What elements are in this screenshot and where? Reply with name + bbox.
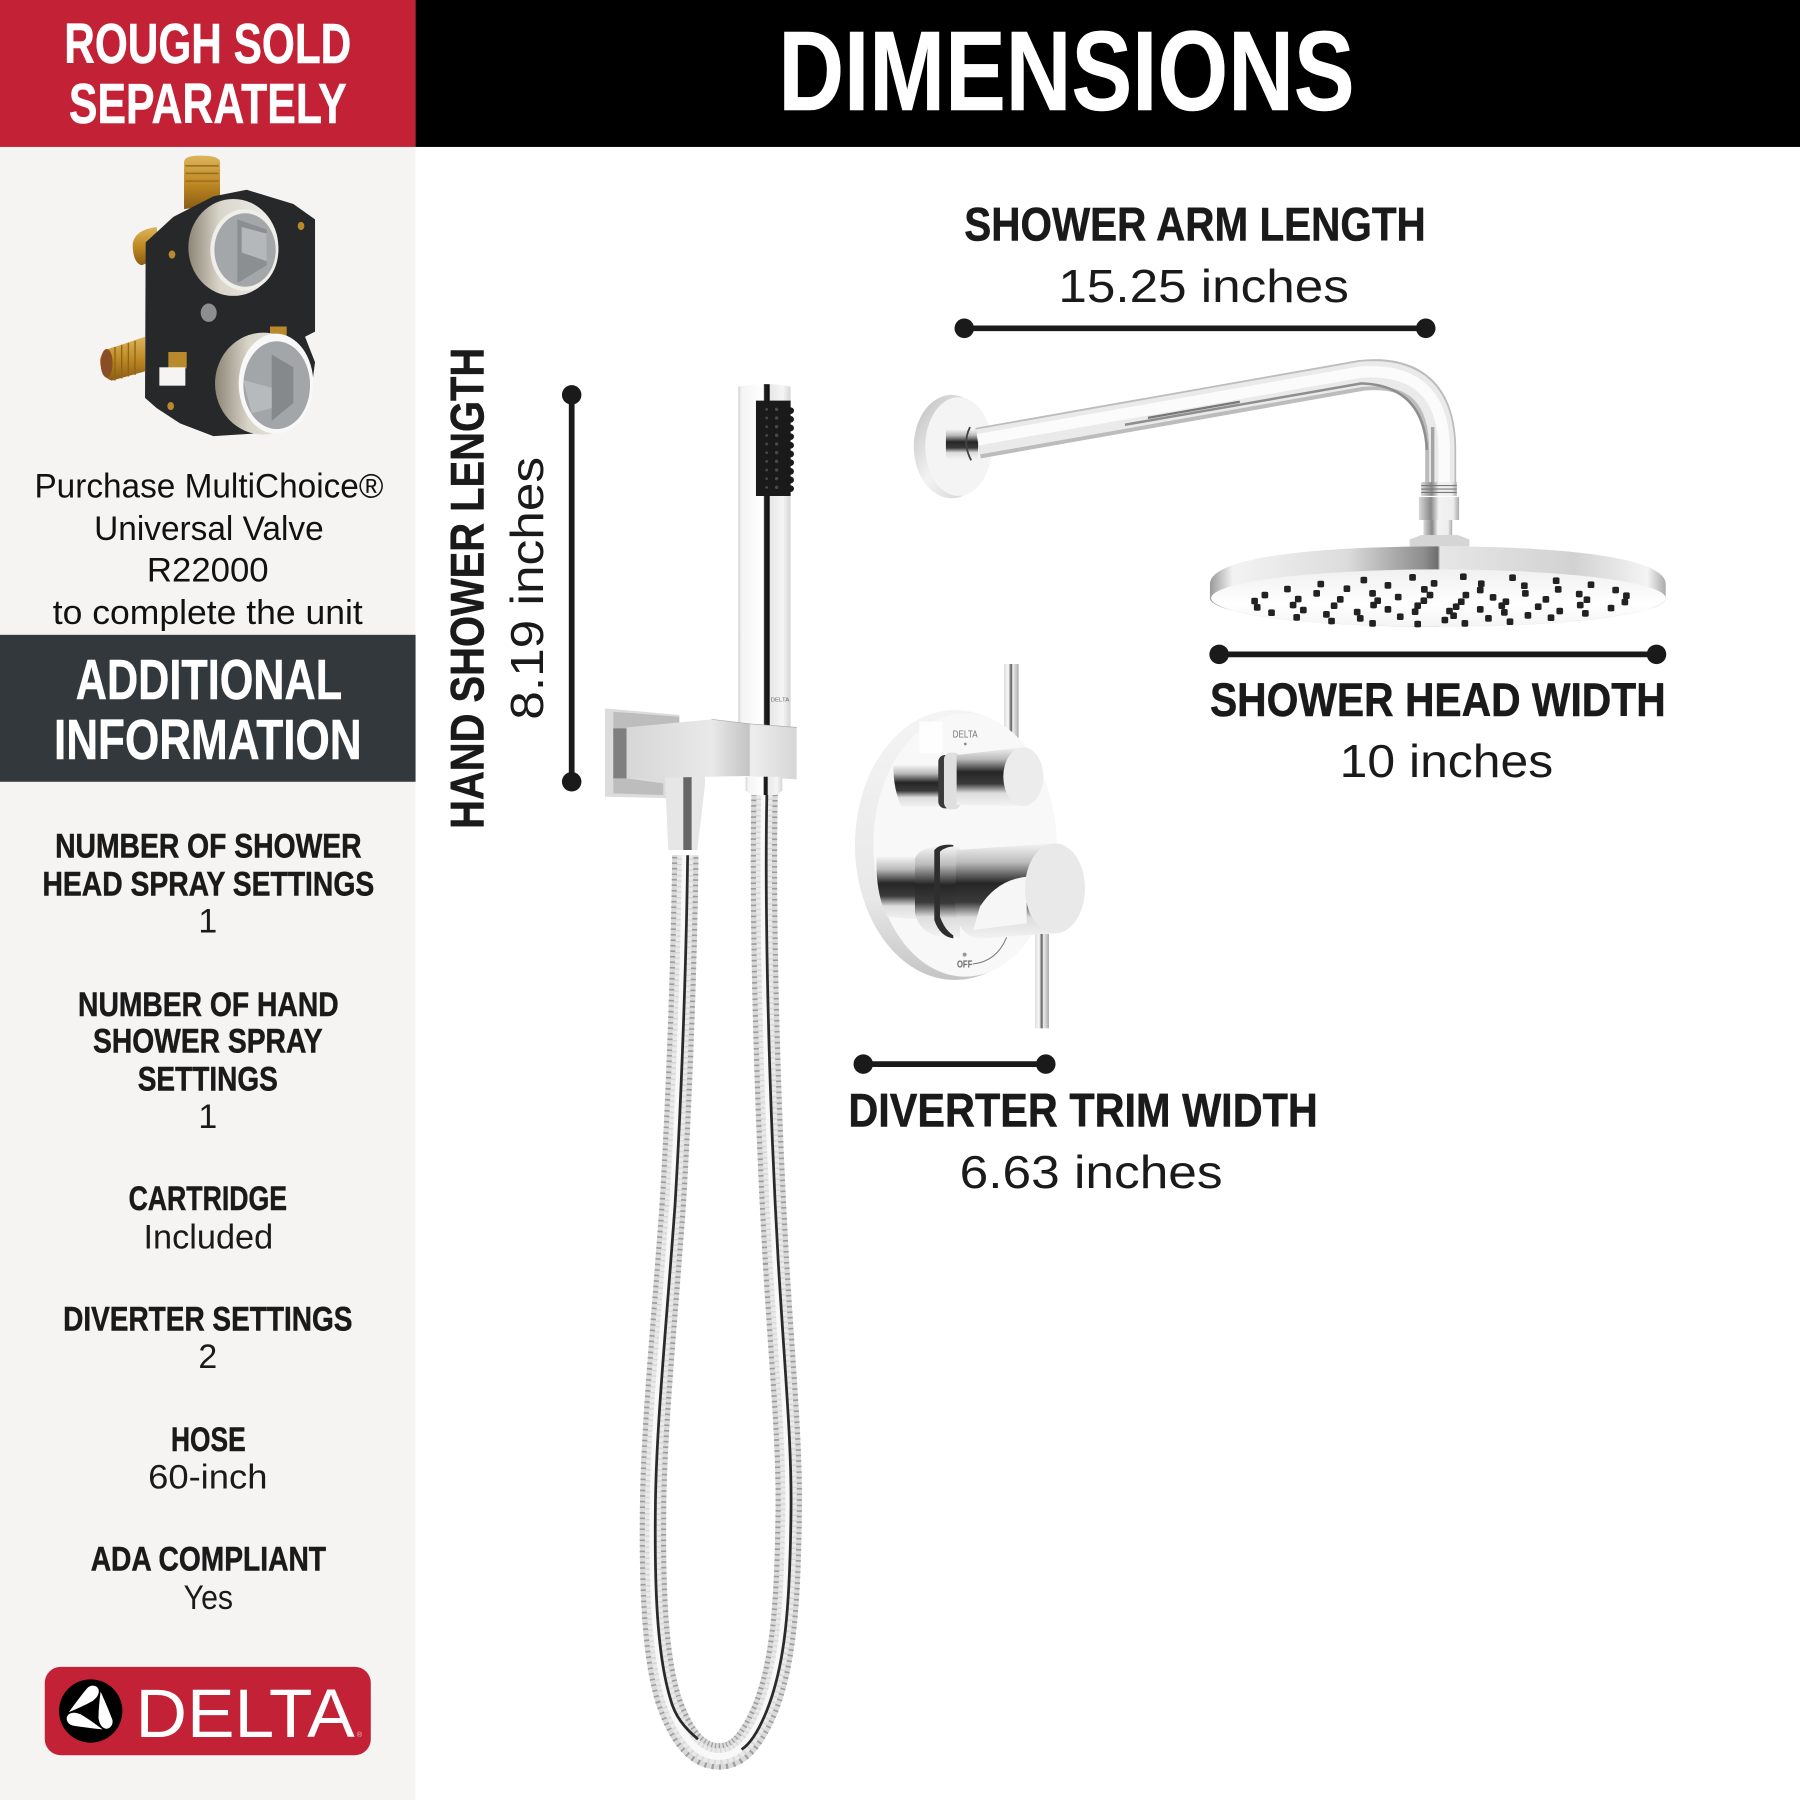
- illustration: shower arm and rain head: [914, 372, 1666, 627]
- upper handle: [893, 747, 1043, 809]
- spec: ada compliant: [91, 1540, 326, 1617]
- logo: delta: ®: [357, 1731, 362, 1739]
- header text: INFORMATION: [54, 708, 362, 771]
- header text: [54, 648, 362, 771]
- spec: cartridge: CARTRIDGE: [129, 1180, 287, 1218]
- spec: hand shower spray settings: SHOWER SPRAY: [93, 1023, 323, 1061]
- dimension: diverter trim width: DIVERTER TRIM WIDTH: [848, 1084, 1318, 1137]
- dimension: shower arm length: 15.25 inches: [1058, 260, 1349, 312]
- text block: purchase valve note: Purchase MultiChoice®: [34, 468, 383, 506]
- lower lever: [1035, 934, 1049, 1028]
- dimension: hand shower length: [440, 348, 581, 829]
- lower handle: [915, 843, 1085, 938]
- dimension: hand shower length: 8.19 inches: [501, 457, 553, 720]
- text block: purchase valve note: [34, 468, 383, 632]
- spec: hose: HOSE: [171, 1421, 246, 1459]
- panel: dimensions title bar: [416, 0, 1800, 147]
- spec: hand shower spray settings: 1: [198, 1098, 217, 1136]
- title: DIMENSIONS: [778, 8, 1355, 135]
- dimension: shower head width: SHOWER HEAD WIDTH: [1210, 673, 1666, 726]
- plate logo: DELTA: [953, 729, 978, 740]
- connector: [1410, 482, 1469, 546]
- dimension: shower arm length: [955, 197, 1436, 338]
- illustration: hand shower: [605, 384, 797, 850]
- spec: shower head spray settings: NUMBER OF SHOWER: [55, 828, 362, 866]
- text block: purchase valve note: to complete the unit: [53, 594, 363, 632]
- wand: [738, 384, 791, 727]
- dimension: shower arm length: SHOWER ARM LENGTH: [964, 197, 1426, 250]
- head face: [1211, 569, 1666, 627]
- dimension: diverter trim width: 6.63 inches: [960, 1146, 1223, 1198]
- spray face: [756, 401, 794, 496]
- spec: diverter settings: [63, 1300, 352, 1376]
- header text: ADDITIONAL: [76, 648, 342, 711]
- spec: diverter settings: DIVERTER SETTINGS: [63, 1300, 352, 1338]
- dimension: diverter trim width: [848, 1054, 1318, 1198]
- panel: specification list: [42, 828, 374, 1617]
- wand logo: DELTA: [771, 698, 790, 704]
- off marking: [957, 937, 1007, 971]
- panel: additional information header: [0, 635, 416, 782]
- spec: cartridge: [129, 1180, 287, 1256]
- spec: ada compliant: Yes: [184, 1579, 233, 1617]
- spec: hand shower spray settings: [78, 986, 339, 1136]
- logo: delta: [45, 1667, 371, 1755]
- icon: universal valve rough-in: [100, 156, 315, 436]
- spec: ada compliant: ADA COMPLIANT: [91, 1540, 326, 1578]
- dimension: shower head width: 10 inches: [1340, 735, 1553, 787]
- banner heading: ROUGH SOLD: [64, 12, 351, 75]
- dimension: shower head width: [1209, 645, 1666, 787]
- plate logo: [919, 722, 978, 753]
- spec: hose: [148, 1421, 267, 1496]
- off marking: OFF: [957, 960, 972, 971]
- panel: rough sold separately banner: [0, 0, 416, 147]
- text block: purchase valve note: R22000: [147, 551, 269, 589]
- logo: delta: DELTA: [135, 1675, 355, 1752]
- spec: cartridge: Included: [143, 1218, 273, 1256]
- spec: shower head spray settings: 1: [198, 903, 217, 941]
- banner heading: [64, 12, 351, 135]
- wall bracket: [605, 708, 797, 850]
- illustration: hose: [653, 794, 791, 1756]
- spec: diverter settings: 2: [198, 1338, 217, 1376]
- spec: shower head spray settings: HEAD SPRAY SETTINGS: [42, 865, 374, 903]
- escutcheon plate: [855, 710, 1057, 980]
- illustration: diverter trim: [855, 664, 1085, 1028]
- spray nozzles: [1251, 573, 1630, 627]
- wall flange: [914, 395, 992, 498]
- spec: shower head spray settings: [42, 828, 374, 941]
- spec: hand shower spray settings: NUMBER OF HAND: [78, 986, 339, 1024]
- text block: purchase valve note: Universal Valve: [94, 510, 324, 548]
- sidebar background: [0, 0, 416, 1800]
- head rim: [1210, 546, 1666, 627]
- arm tube: [978, 372, 1444, 487]
- banner heading: SEPARATELY: [69, 72, 347, 135]
- spec: hose: 60-inch: [148, 1458, 267, 1496]
- dimension: hand shower length: HAND SHOWER LENGTH: [440, 348, 493, 829]
- upper lever: [1004, 664, 1019, 747]
- spec: hand shower spray settings: SETTINGS: [138, 1061, 278, 1099]
